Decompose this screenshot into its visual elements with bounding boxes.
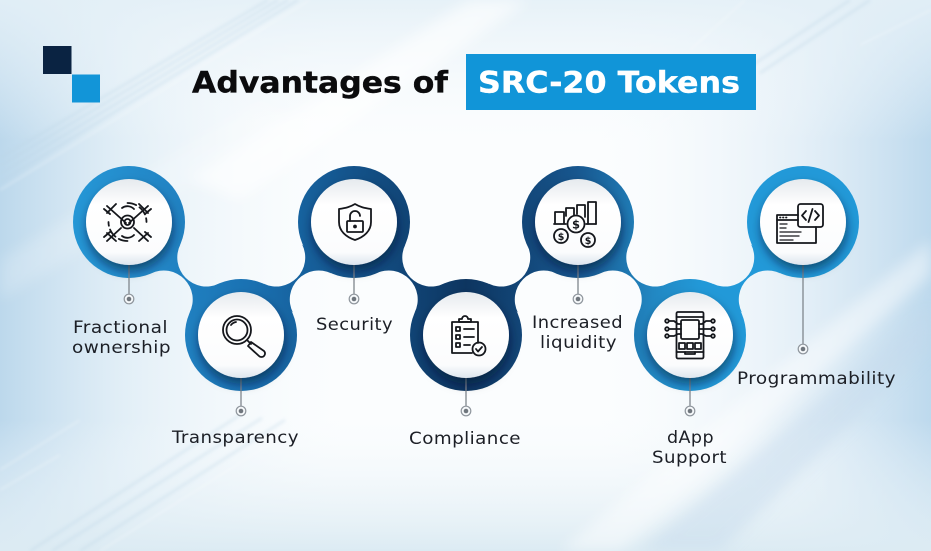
stem and dot bbox=[124, 262, 134, 304]
label: Programmability bbox=[737, 369, 896, 388]
label: Transparency bbox=[171, 428, 299, 447]
disc bbox=[198, 292, 284, 378]
icon: bars and coins: $ bbox=[572, 218, 580, 232]
step 7: programmability bbox=[737, 179, 896, 388]
stem and dot bbox=[349, 262, 359, 304]
label: liquidity bbox=[540, 333, 617, 352]
icon: hands around token bbox=[104, 203, 151, 241]
label: Security bbox=[316, 315, 393, 334]
label: Support bbox=[652, 448, 727, 467]
step 1: fractional ownership bbox=[72, 179, 172, 357]
step 5: increased liquidity bbox=[532, 179, 623, 352]
label: Compliance bbox=[409, 429, 521, 448]
disc bbox=[535, 179, 621, 265]
label: dApp bbox=[667, 428, 714, 447]
label bbox=[652, 428, 727, 467]
step 6: dApp support bbox=[647, 292, 733, 467]
icon: magnifier bbox=[223, 316, 265, 357]
icon: bars and coins bbox=[554, 202, 596, 247]
icon: checklist clipboard bbox=[452, 316, 486, 356]
step 3: security bbox=[311, 179, 397, 334]
disc bbox=[311, 179, 397, 265]
title highlight box: SRC-20 Tokens bbox=[478, 66, 740, 100]
icon: shield with lock bbox=[339, 204, 371, 240]
logo bbox=[43, 46, 100, 102]
label: Fractional bbox=[73, 318, 168, 337]
disc bbox=[760, 179, 846, 265]
step 2: transparency bbox=[171, 292, 299, 447]
label: Increased bbox=[532, 313, 623, 332]
title: Advantages of bbox=[192, 66, 449, 100]
connected ribbon bbox=[73, 166, 859, 391]
icon: phone with circuit bbox=[665, 312, 715, 358]
label bbox=[72, 318, 171, 357]
disc bbox=[423, 292, 509, 378]
icon: code window bbox=[777, 204, 823, 243]
title bbox=[192, 54, 756, 110]
title highlight box bbox=[466, 54, 756, 110]
label bbox=[532, 313, 623, 352]
icon: bars and coins: $ bbox=[558, 232, 564, 243]
stem and dot bbox=[236, 375, 246, 416]
disc bbox=[86, 179, 172, 265]
label: ownership bbox=[72, 338, 171, 357]
icon: bars and coins: $ bbox=[585, 236, 591, 247]
stem and dot bbox=[573, 262, 583, 304]
disc bbox=[647, 292, 733, 378]
stem and dot bbox=[685, 375, 695, 416]
stem and dot bbox=[461, 375, 471, 416]
stem and dot bbox=[798, 262, 808, 354]
step 4: compliance bbox=[409, 292, 521, 448]
